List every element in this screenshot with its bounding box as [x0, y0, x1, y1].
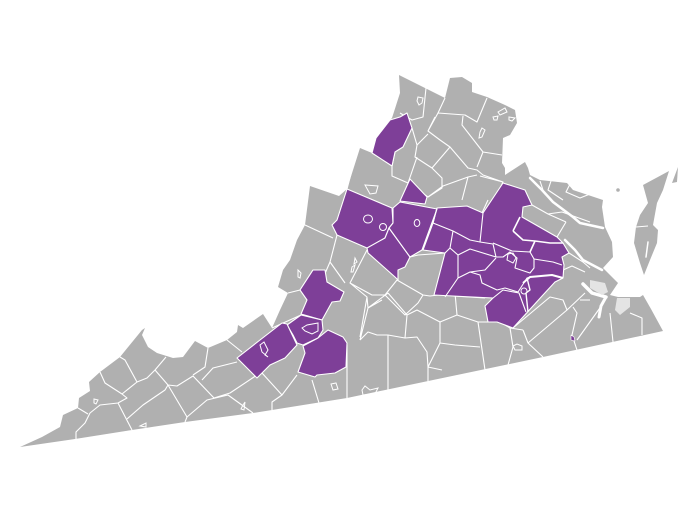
county boundary lines — [76, 88, 648, 439]
purple counties — [237, 113, 575, 378]
county: Albemarle area — [389, 202, 437, 257]
light grey independent cities — [590, 280, 630, 315]
outline of the purple eastern block — [423, 183, 569, 328]
eastern shore — [634, 171, 669, 275]
small purple city — [571, 335, 575, 341]
enclaves in purple counties — [260, 215, 527, 357]
purple eastern block backdrop — [423, 183, 569, 328]
county: northern purple — [372, 113, 412, 166]
county: Floyd area — [298, 330, 347, 377]
county: Roanoke area — [300, 270, 344, 320]
small city outlines — [94, 97, 522, 427]
eastern block county boundaries — [433, 208, 563, 312]
county: Montgomery area — [287, 315, 323, 345]
state base shape — [20, 75, 678, 447]
county: Nelson area — [367, 228, 410, 280]
county: Pulaski area — [237, 323, 297, 378]
county: Greene area — [400, 179, 427, 204]
water: tidal rivers — [530, 178, 648, 317]
county: Augusta area — [332, 189, 393, 248]
